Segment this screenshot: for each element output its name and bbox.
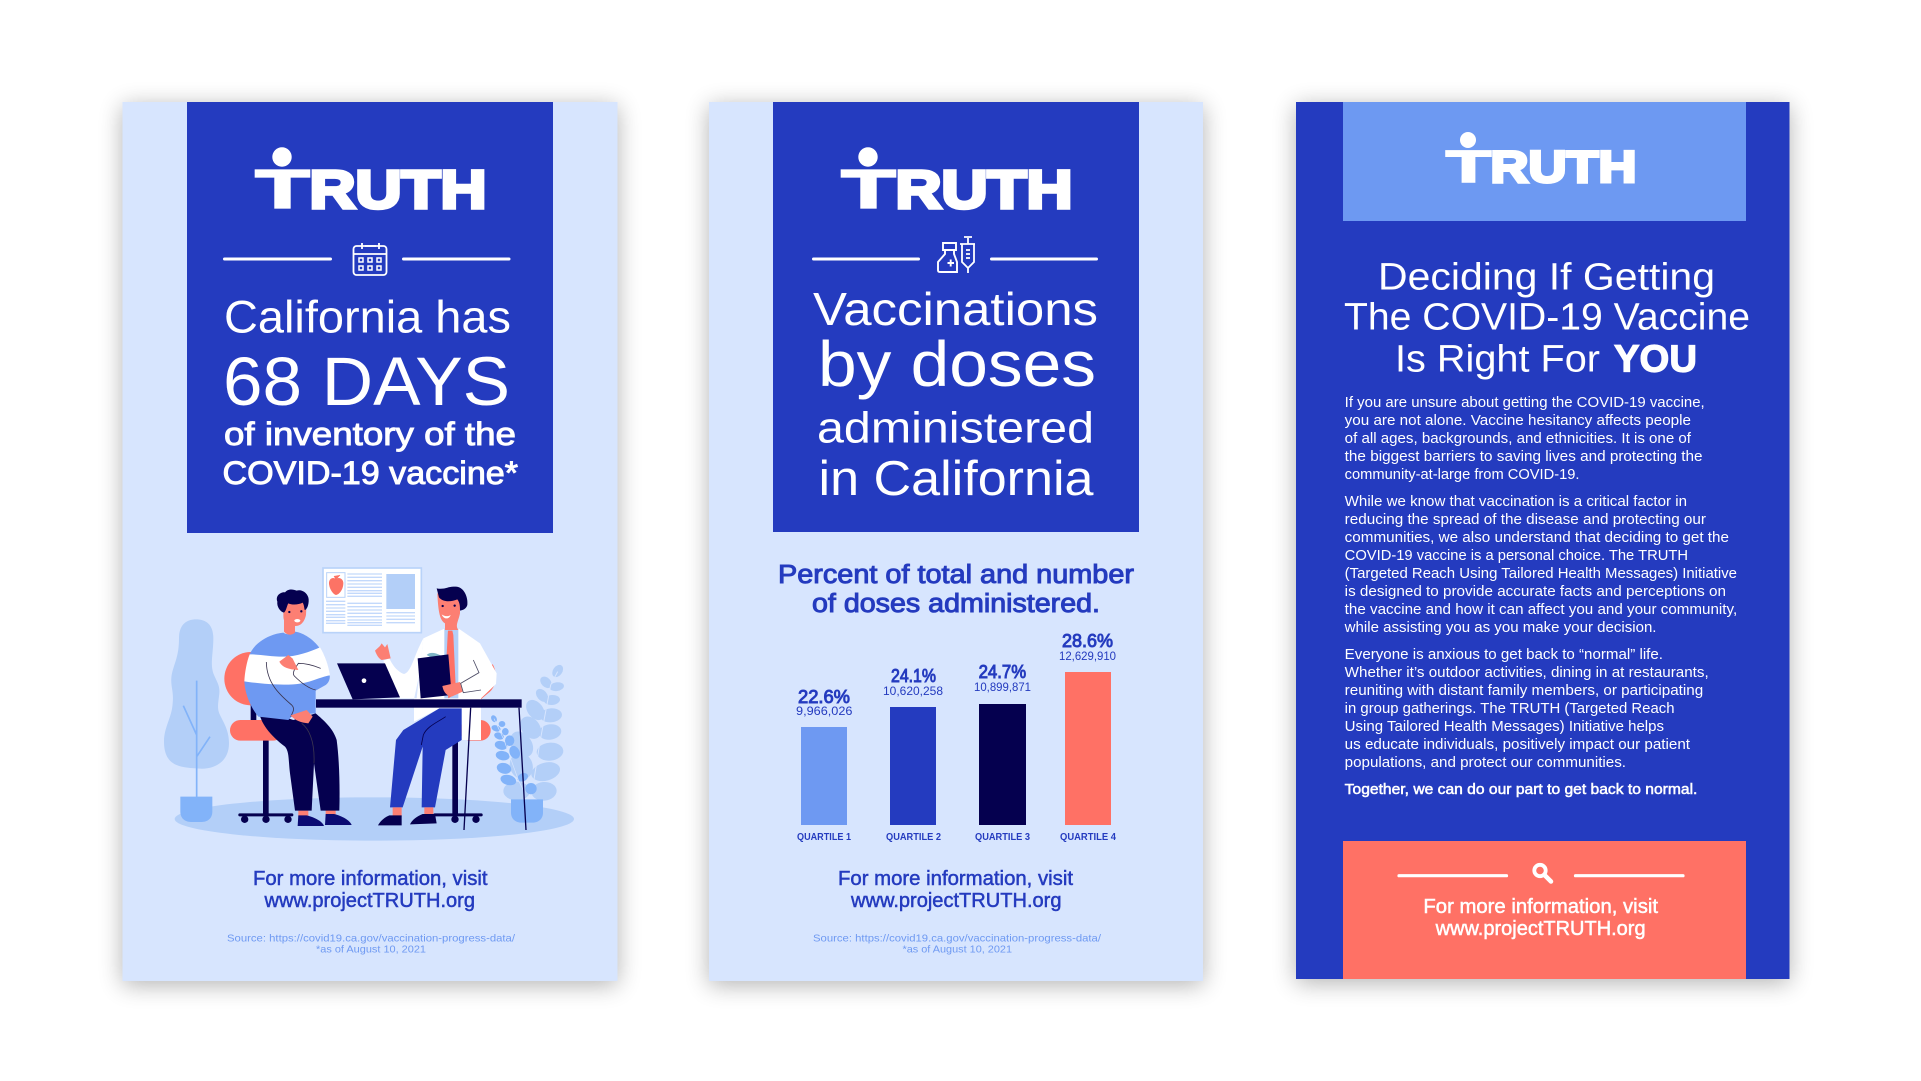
- body paragraph 3: reuniting with distant family members, or participating: [1345, 683, 1703, 699]
- laptop: [337, 663, 400, 699]
- source note: [227, 933, 515, 956]
- floor ellipse: [175, 797, 574, 841]
- headline: 68 DAYS: [223, 343, 510, 420]
- source note: [813, 933, 1101, 956]
- TRUTH logo: T: [1446, 142, 1491, 192]
- right potted plants: [490, 663, 565, 823]
- bar: quartile 4: QUARTILE 4: [1060, 832, 1116, 843]
- panel: California inventory poster: [122, 102, 618, 985]
- headline: in California: [818, 452, 1094, 506]
- TRUTH logo: [842, 147, 1072, 220]
- TRUTH logo: [1446, 132, 1636, 192]
- chart heading: of doses administered.: [812, 590, 1100, 618]
- body paragraph 3: Using Tailored Health Messages) Initiative helps: [1345, 719, 1664, 735]
- body paragraph 2: While we know that vaccination is a critical factor in: [1345, 494, 1687, 510]
- source note: Source: https://covid19.ca.gov/vaccination-progress-data/: [813, 933, 1101, 945]
- body paragraph 2: COVID-19 vaccine is a personal choice. The TRUTH: [1345, 548, 1688, 564]
- body paragraph 1: [1345, 395, 1705, 483]
- bar: quartile 3: 24.7%: [979, 661, 1026, 682]
- call to action: For more information, visit: [838, 867, 1073, 890]
- call to action: For more information, visit: [253, 867, 488, 890]
- wall chart: [323, 568, 421, 633]
- headline: [222, 292, 518, 491]
- body paragraph 2: while assisting you as you make your decision.: [1344, 620, 1656, 636]
- body paragraph 2: the vaccine and how it can affect you and your community,: [1345, 602, 1737, 618]
- source note: Source: https://covid19.ca.gov/vaccination-progress-data/: [227, 933, 515, 945]
- desk legs: [464, 708, 526, 830]
- body paragraph 2: reducing the spread of the disease and protecting our: [1345, 512, 1706, 528]
- chart heading: [778, 561, 1135, 618]
- headline: COVID-19 vaccine*: [222, 455, 518, 491]
- panel: deciding about the vaccine poster: [1296, 102, 1790, 983]
- bar: quartile 3: 10,899,871: [974, 680, 1031, 694]
- TRUTH logo: T: [842, 160, 896, 220]
- body paragraph 3: us educate individuals, positively impact our patient: [1345, 737, 1690, 753]
- body paragraph 1: the biggest barriers to saving lives and protecting the: [1345, 449, 1702, 465]
- body paragraph 2: communities, we also understand that deciding to get the: [1345, 530, 1729, 546]
- bar: quartile 4: 12,629,910: [1059, 649, 1116, 663]
- title: The COVID-19 Vaccine: [1344, 297, 1750, 339]
- doctor raised hand: [375, 643, 391, 660]
- body paragraph 2: is designed to provide accurate facts and perceptions on: [1345, 584, 1726, 600]
- title: Deciding If Getting: [1378, 257, 1715, 299]
- body paragraph 3: Everyone is anxious to get back to “normal” life.: [1345, 647, 1663, 663]
- bar: quartile 2: QUARTILE 2: [886, 832, 941, 843]
- body paragraph 2: (Targeted Reach Using Tailored Health Messages) Initiative: [1345, 566, 1737, 582]
- bar: quartile 2: 24.1%: [891, 665, 936, 686]
- bar: quartile 3: [974, 661, 1031, 843]
- icon: calendar with divider lines: [224, 243, 509, 275]
- body paragraph 1: If you are unsure about getting the COVID-19 vaccine,: [1345, 395, 1705, 411]
- body paragraph 3: [1345, 647, 1709, 771]
- call to action block: [1343, 841, 1746, 979]
- headline: California has: [224, 292, 511, 342]
- body paragraph 3: populations, and protect our communities.: [1345, 755, 1626, 771]
- call to action block: www.projectTRUTH.org: [1435, 917, 1646, 940]
- illustration: patient and doctor at a desk: [164, 568, 574, 841]
- body paragraph 3: in group gatherings. The TRUTH (Targeted Reach: [1345, 701, 1674, 717]
- patient figure: [244, 589, 352, 826]
- logo block: [1343, 102, 1746, 221]
- source note: *as of August 10, 2021: [902, 944, 1012, 956]
- headline: administered: [817, 404, 1094, 453]
- headline: by doses: [818, 328, 1096, 400]
- doctor figure: [378, 587, 497, 825]
- patient chair: [224, 652, 293, 823]
- desk: [316, 699, 522, 708]
- bar chart: [796, 630, 1116, 843]
- closing statement: Together, we can do our part to get back to normal.: [1345, 782, 1697, 798]
- bar: quartile 2: [883, 665, 943, 843]
- source note: *as of August 10, 2021: [316, 944, 426, 956]
- bar: quartile 4: [1059, 630, 1116, 843]
- body paragraph 1: of all ages, backgrounds, and ethnicities. It is one of: [1345, 431, 1692, 447]
- TRUTH logo: RUTH: [896, 160, 1072, 220]
- call to action: [838, 867, 1073, 912]
- TRUTH logo: RUTH: [1490, 143, 1636, 192]
- header block: [187, 102, 553, 533]
- call to action: [253, 867, 488, 912]
- bar: quartile 3: QUARTILE 3: [975, 832, 1030, 843]
- title: [1344, 257, 1750, 380]
- call to action: www.projectTRUTH.org: [264, 889, 475, 912]
- body paragraph 1: community-at-large from COVID-19.: [1345, 467, 1580, 483]
- TRUTH logo: [256, 147, 486, 220]
- headline: [813, 283, 1098, 506]
- bar: quartile 2: 10,620,258: [883, 684, 943, 698]
- title: Is Right For: [1395, 338, 1600, 380]
- body paragraph 2: [1344, 494, 1737, 636]
- bar: quartile 1: [796, 686, 853, 843]
- TRUTH logo: RUTH: [310, 160, 486, 220]
- left potted plant: [164, 619, 229, 822]
- bar: quartile 1: 9,966,026: [796, 704, 853, 718]
- headline: Vaccinations: [813, 283, 1098, 335]
- title: YOU: [1614, 338, 1697, 380]
- icon: magnifier with divider lines: [1399, 865, 1683, 882]
- call to action block: For more information, visit: [1423, 895, 1658, 918]
- icon: vial and syringe with divider lines: [814, 237, 1096, 273]
- doctor chair: [433, 664, 496, 823]
- panel: doses bar chart poster: [709, 102, 1203, 985]
- bar: quartile 1: QUARTILE 1: [797, 832, 851, 843]
- TRUTH logo: T: [256, 160, 310, 220]
- header block: [773, 102, 1139, 532]
- chart heading: Percent of total and number: [778, 561, 1135, 589]
- call to action: www.projectTRUTH.org: [850, 889, 1062, 912]
- body paragraph 1: you are not alone. Vaccine hesitancy affects people: [1345, 413, 1691, 429]
- clipboard and hand: [418, 653, 481, 698]
- headline: of inventory of the: [224, 416, 516, 452]
- body paragraph 3: Whether it’s outdoor activities, dining in at restaurants,: [1345, 665, 1709, 681]
- bar: quartile 4: 28.6%: [1062, 630, 1113, 651]
- bar: quartile 1: 22.6%: [798, 686, 850, 707]
